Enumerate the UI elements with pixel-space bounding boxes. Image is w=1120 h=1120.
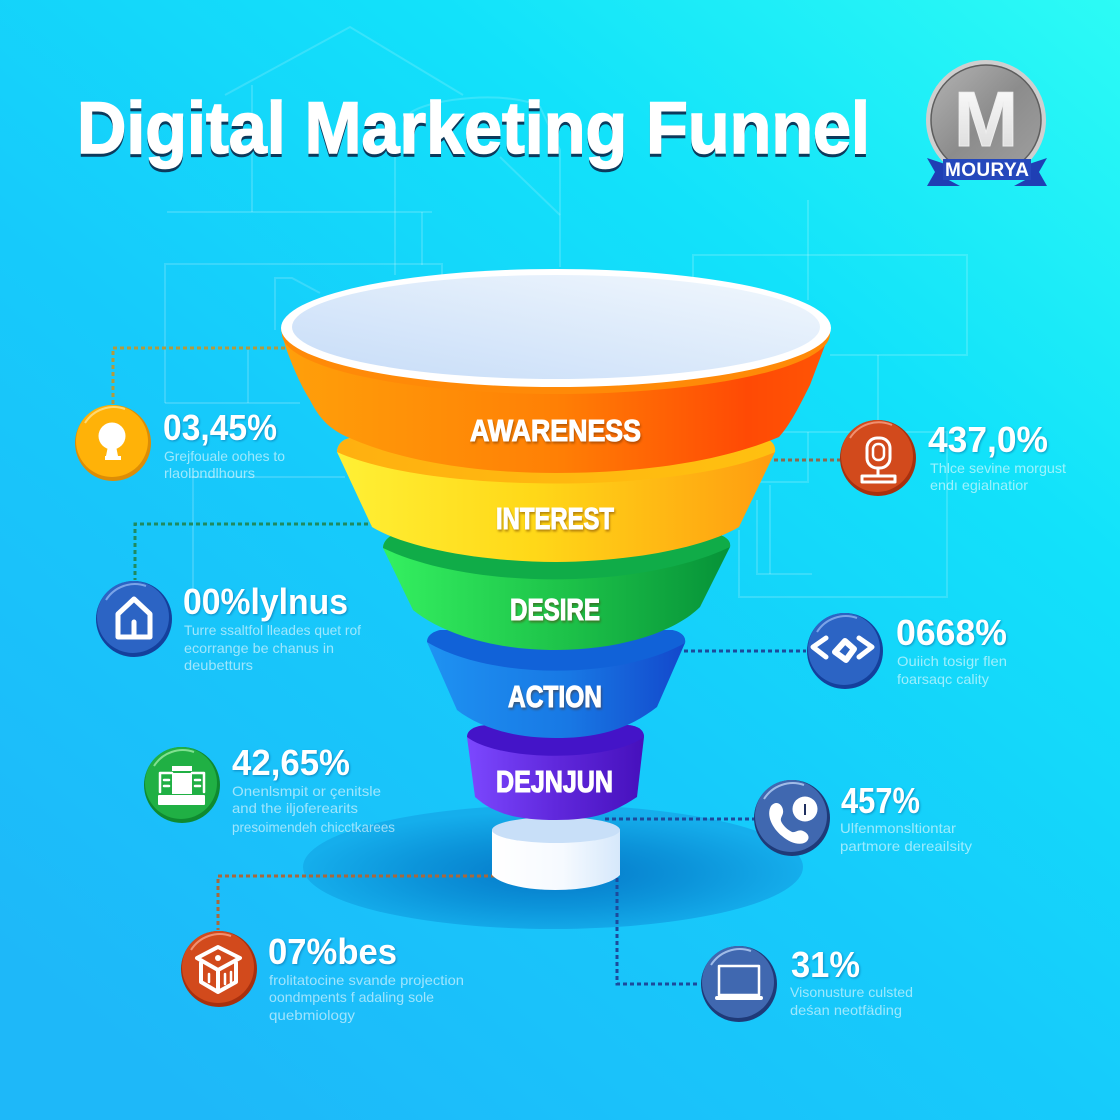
icon: server: [144, 747, 220, 823]
tier: desire: [383, 534, 730, 650]
stat item 3: Turre ssaltfol lleades quet rof: [184, 622, 361, 638]
icon: microphone: [840, 420, 916, 496]
tier: purple: [467, 725, 644, 820]
stat item 2: 437,0%: [928, 419, 1048, 460]
tier: purple: DEJNJUN: [496, 764, 613, 799]
connector lines: [113, 348, 840, 984]
stat item 1: Grejfouale oohes to: [164, 448, 285, 464]
stat item 6: Ulfenmonsltiontar: [840, 820, 956, 836]
stat item 3: ecorrange be chanus in: [184, 640, 334, 656]
stat item 4: [807, 612, 1007, 689]
stat item 4: foarsaqc cality: [897, 671, 989, 687]
stat item 5: presoimendeh chicctkarees: [232, 819, 395, 835]
stat item 5: [144, 742, 395, 835]
stat item 8: [701, 944, 913, 1022]
stat item 7: [181, 931, 464, 1023]
icon: phone: [754, 780, 830, 856]
stat item 8: Visonusture culsted: [790, 984, 913, 1000]
stat item 5: Onenlsmpit or çenitsle: [232, 783, 381, 799]
logo: Mourya badge: [926, 60, 1047, 186]
icon: house: [96, 581, 172, 657]
stat item 1: 03,45%: [163, 407, 277, 448]
base cylinder: [492, 817, 620, 890]
stat item 7: quebmiology: [269, 1007, 355, 1023]
stat item 4: 0668%: [896, 612, 1007, 653]
stat item 3: 00%lylnus: [183, 581, 348, 622]
icon: box: [181, 931, 257, 1007]
stat item 2: [840, 419, 1066, 496]
stat item 2: Thlce sevine morgust: [930, 460, 1066, 476]
tier: awareness: [281, 269, 831, 473]
tier: interest: [337, 438, 775, 562]
stat item 8: 31%: [791, 944, 860, 985]
icon: laptop: [701, 946, 777, 1022]
icon: bulb: [75, 405, 151, 481]
tier: desire: DESIRE: [510, 592, 600, 627]
tier: interest: INTEREST: [496, 501, 614, 536]
stat item 7: oondmpents f adaling sole: [269, 989, 434, 1005]
icon: code: [807, 613, 883, 689]
stat item 3: deubetturs: [184, 657, 253, 673]
floor shadow: [303, 805, 803, 929]
stat item 8: deśan neotfäding: [790, 1002, 902, 1018]
stat item 5: 42,65%: [232, 742, 350, 783]
stat item 4: Ouiich tosigr flen: [897, 653, 1007, 669]
stat item 5: and the iljoferearits: [232, 800, 358, 816]
blueprint house line art: [165, 27, 967, 597]
stat item 6: [754, 780, 972, 856]
stat item 1: rlaolbndlhours: [164, 465, 255, 481]
tier: action: ACTION: [508, 679, 602, 714]
stat item 1: [75, 405, 285, 481]
logo: Mourya badge: M: [954, 75, 1018, 163]
stat item 3: [96, 581, 361, 673]
stat item 2: endı egialnatior: [930, 477, 1028, 493]
stat item 6: 457%: [841, 780, 920, 821]
title: Digital Marketing Funnel: [77, 88, 870, 169]
tier: action: [427, 630, 685, 738]
tier: awareness: AWARENESS: [470, 413, 641, 448]
stat item 7: frolitatocine svande projection: [269, 972, 464, 988]
logo: Mourya badge: MOURYA: [945, 160, 1029, 181]
funnel: [281, 269, 831, 890]
stat item 7: 07%bes: [268, 931, 397, 972]
stat item 6: partmore dereailsity: [840, 838, 972, 854]
